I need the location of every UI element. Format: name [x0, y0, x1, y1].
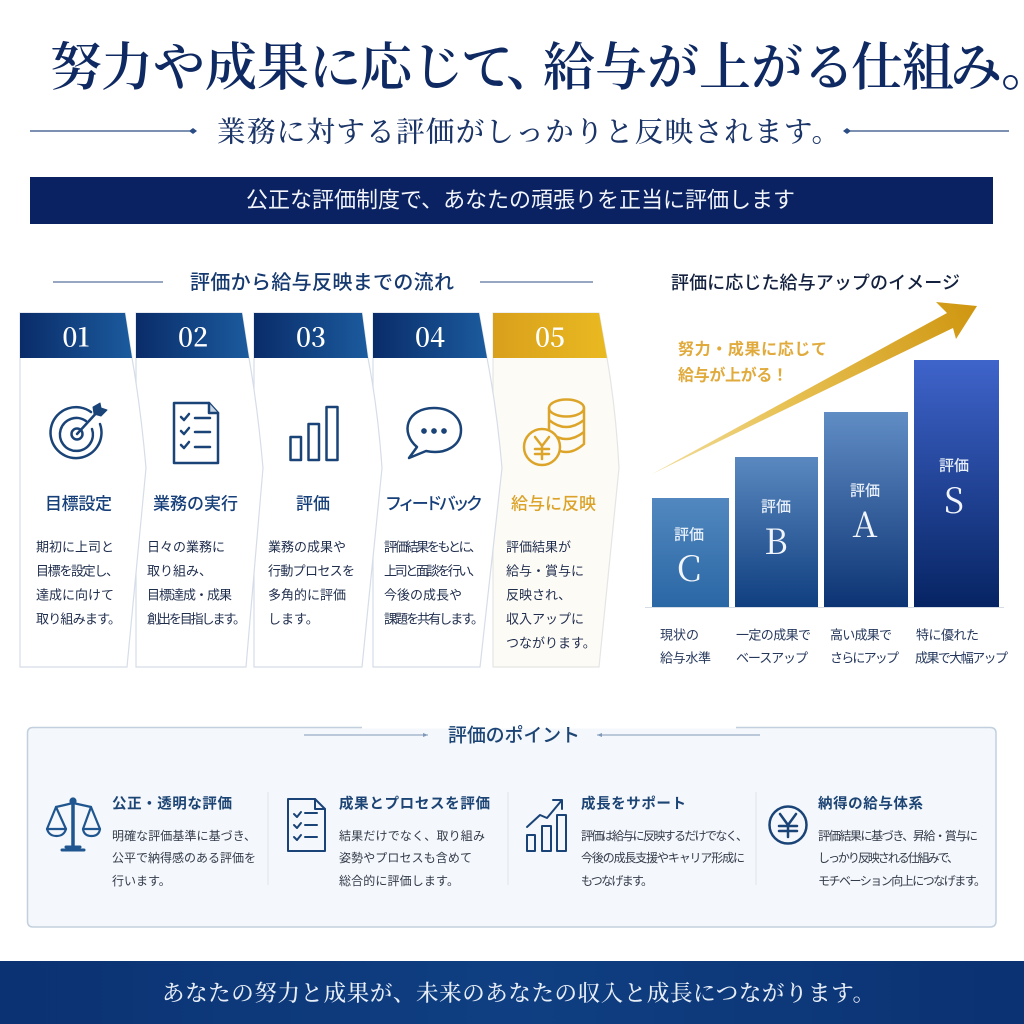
step 05 card: 反映され、	[506, 588, 571, 602]
step 03 card: 業務の成果や	[268, 540, 346, 554]
panel: evaluation points	[28, 720, 996, 927]
title: 努力や成果に応じて、給与が上がる仕組み。	[50, 26, 1024, 100]
chart: salary increase image	[645, 273, 1008, 666]
bar S: 評価	[939, 458, 969, 474]
point 3: 評価は給与に反映するだけでなく、	[581, 829, 748, 843]
bar C: 評価	[674, 526, 704, 544]
callout: 給与が上がる！	[678, 366, 788, 384]
icon: growth chart	[527, 800, 566, 851]
step 04 card: 上司と面談を行い、	[384, 564, 482, 578]
step 03 card: 行動プロセスを	[268, 564, 355, 578]
bar C: C	[677, 542, 701, 592]
step 01 card: 01	[62, 318, 90, 354]
step 02 card: 取り組み、	[147, 564, 212, 578]
bar S	[914, 360, 999, 607]
point 1: 公正・透明な評価	[112, 796, 232, 812]
step 02 card	[136, 313, 263, 667]
callout: 努力・成果に応じて	[678, 340, 827, 358]
step 04 card: 評価結果をもとに、	[384, 540, 482, 554]
step 01 card	[20, 313, 146, 667]
step 01 card: 達成に向けて	[36, 588, 114, 602]
bar captions: 成果で大幅アップ	[915, 650, 1008, 666]
flow section heading: 評価から給与反映までの流れ	[190, 271, 454, 294]
step 04 card: 04	[415, 318, 445, 354]
bar captions: 給与水準	[660, 650, 711, 666]
point 1: 公平で納得感のある評価を	[112, 850, 256, 865]
callout	[678, 340, 827, 384]
point 2: 総合的に評価します。	[339, 873, 459, 888]
bar captions: 一定の成果で	[736, 628, 811, 642]
icon: bar chart	[290, 407, 338, 460]
point 1: 行います。	[112, 874, 171, 888]
subtitle with side rules: 業務に対する評価がしっかりと反映されます。	[217, 110, 840, 150]
icon: target	[51, 403, 107, 458]
bar captions: さらにアップ	[830, 650, 899, 666]
step 02 card: 目標達成・成果	[147, 588, 232, 602]
step 05 card	[493, 313, 619, 667]
footer band: あなたの努力と成果が、未来のあなたの収入と成長につながります。	[162, 976, 875, 1008]
step 05 card: 給与・賞与に	[506, 564, 584, 578]
step 04 card: 今後の成長や	[384, 588, 462, 602]
step 05 card: つながります。	[506, 636, 596, 650]
step 02 card: 創出を目指します。	[147, 612, 246, 626]
bar S: S	[944, 474, 964, 524]
point 2	[288, 794, 490, 888]
bar A: A	[852, 498, 878, 548]
step 04 card	[373, 313, 502, 667]
bar B: 評価	[761, 498, 791, 516]
point 1: 明確な評価基準に基づき、	[112, 828, 256, 843]
footer band	[0, 961, 1024, 1024]
step 05 card: 給与に反映	[511, 494, 596, 514]
point 1	[47, 796, 256, 888]
point 4	[770, 794, 986, 888]
bar C	[652, 498, 729, 607]
point 3: 成長をサポート	[581, 794, 686, 812]
bar A: 評価	[850, 482, 880, 500]
bar B: B	[764, 515, 788, 565]
point 4: 納得の給与体系	[818, 794, 924, 812]
banner	[30, 177, 993, 224]
icon: speech bubble	[408, 408, 461, 458]
point 4: 評価結果に基づき、昇給・賞与に	[818, 829, 978, 843]
step 01 card: 期初に上司と	[36, 540, 114, 554]
point 4: モチベーション向上につなげます。	[818, 873, 986, 888]
step 01 card: 目標を設定し、	[36, 564, 119, 578]
point 3	[527, 794, 748, 888]
point 2: 成果とプロセスを評価	[339, 794, 490, 812]
icon: document checklist	[288, 799, 325, 851]
step 03 card: します。	[268, 612, 319, 626]
bar captions: 現状の	[660, 628, 699, 642]
arrow: rising gold	[652, 302, 977, 474]
point 3: 今後の成長支援やキャリア形成に	[581, 850, 745, 865]
chart title: 評価に応じた給与アップのイメージ	[671, 273, 960, 293]
point 2: 姿勢やプロセスも含めて	[339, 850, 472, 865]
bar A	[824, 412, 908, 607]
bar captions: ベースアップ	[736, 650, 808, 666]
step 03 card: 多角的に評価	[268, 588, 346, 602]
step 05 card: 評価結果が	[506, 540, 571, 554]
icon: coins	[524, 400, 584, 465]
step 02 card: 02	[178, 318, 208, 354]
step 03 card: 03	[296, 318, 326, 354]
icon: checklist	[174, 403, 218, 463]
step 05 card: 05	[535, 318, 565, 354]
step 04 card: 課題を共有します。	[384, 612, 484, 626]
step 01 card: 取り組みます。	[36, 612, 121, 626]
bar B	[735, 457, 818, 607]
icon: scales	[47, 798, 100, 850]
point 3: もつなげます。	[581, 874, 653, 888]
banner: 公正な評価制度で、あなたの頑張りを正当に評価します	[246, 188, 795, 212]
bar captions: 特に優れた	[916, 628, 979, 642]
step 01 card: 目標設定	[45, 494, 112, 514]
step 02 card: 業務の実行	[153, 494, 238, 514]
step 02 card: 日々の業務に	[147, 540, 225, 554]
point 2: 結果だけでなく、取り組み	[339, 829, 485, 843]
bar captions: 高い成果で	[830, 628, 892, 642]
step 04 card: フィードバック	[385, 494, 483, 514]
bar captions	[660, 628, 1008, 666]
point 4: しっかり反映される仕組みで、	[818, 851, 959, 865]
step 03 card	[254, 313, 382, 667]
step 05 card: 収入アップに	[506, 612, 584, 626]
subtitle with side rules	[30, 110, 1009, 150]
panel heading: 評価のポイント	[448, 724, 580, 746]
icon: yen circle	[770, 806, 806, 844]
panel heading	[304, 724, 760, 746]
step 03 card: 評価	[296, 494, 330, 514]
